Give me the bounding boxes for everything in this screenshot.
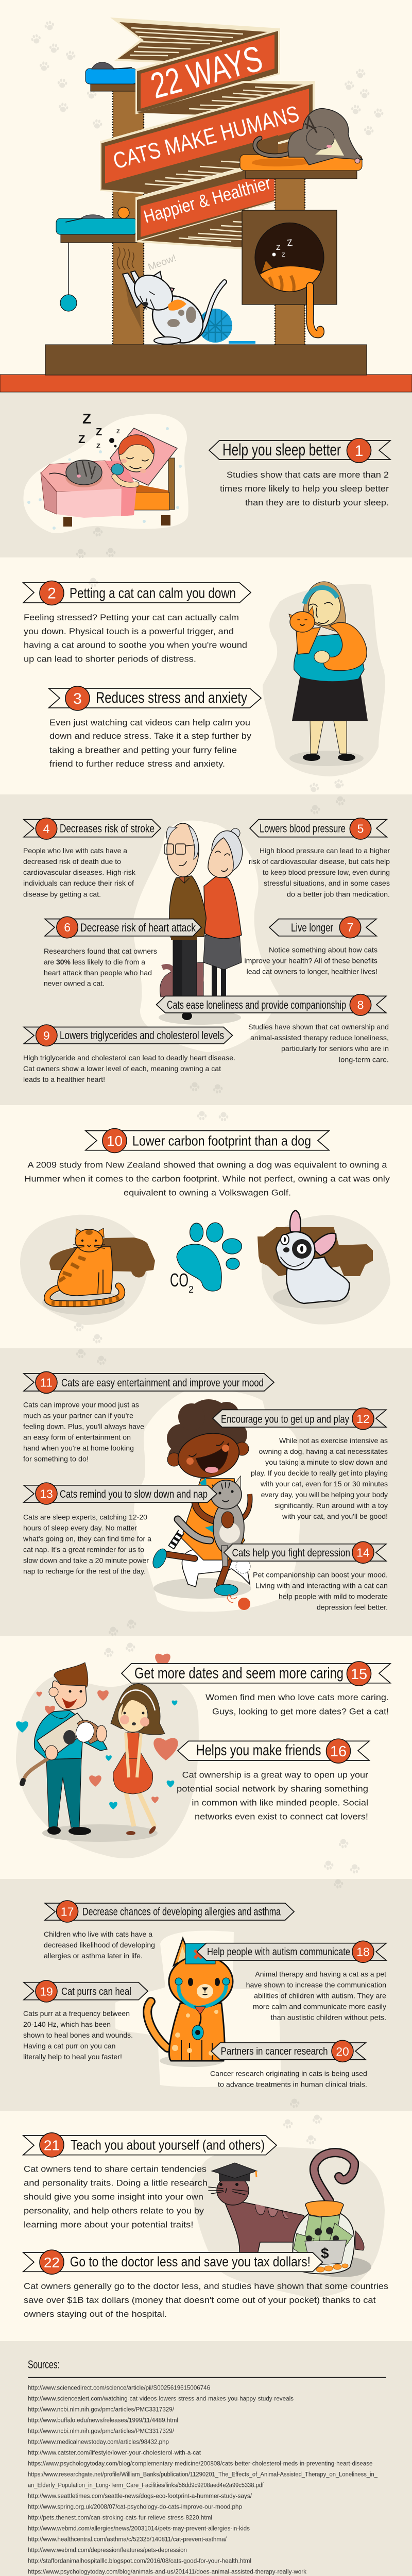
title line 2: CATS MAKE HUMANS [111,101,302,174]
background paw prints [30,20,384,2145]
banner 4: 4 [43,822,50,836]
text 18: more calm and communicate more easily [253,2003,386,2011]
banner 4: Decreases risk of stroke [60,822,154,835]
text 5: High blood pressure can lead to a higher [260,846,390,855]
section 1 illustration: boy sleeping with cat: Z [78,433,85,446]
text 10: equivalent to owning a Volkswagen Golf. [124,1188,291,1198]
text 8: animal-assisted therapy reduce loneliness, [250,1033,389,1042]
banner 14: Cats help you fight depression [232,1547,350,1559]
graduate cat and money jar illustration: $ [321,2245,329,2261]
text 20: to advance treatments in human clinical trials. [218,2080,367,2088]
text 12: play. If you decide to really get into playing [251,1469,388,1477]
sleeping orange cat in house [255,238,324,334]
sources list: http://www.webmd.com/allergies/news/20031014/pets-may-prevent-allergies-in-kids [28,2526,250,2532]
banner 14: 14 [356,1546,370,1560]
meow text: Meow! [147,252,178,273]
floor bar [0,375,412,392]
text 7 [244,945,377,975]
mouse middle [66,215,105,222]
text 4: disease by getting a cat. [23,890,101,899]
banner 16: Helps you make friends [196,1742,321,1759]
sources list: http://www.sciencealert.com/watching-cat-videos-lowers-stress-and-makes-you-happy-study-reveals [28,2396,294,2402]
sources list: http://www.seattletimes.com/seattle-news/dogs-eco-footprint-a-hummer-study-says/ [28,2494,252,2500]
text 19 [23,2009,133,2061]
title line 1: 22 WAYS [147,38,266,106]
text 15: Women find men who love cats more caring. [205,1692,389,1702]
text 9: High triglyceride and cholesterol can lead to deadly heart disease. [23,1054,235,1062]
banner 14 [224,1541,386,1563]
text 14: help people with mild to moderate [279,1592,388,1600]
text 12: with your cat, and you'll be good! [282,1512,388,1520]
text 8: particularly for seniors who are in [281,1044,389,1053]
text 21: and personality traits. Doing a little research [24,2178,208,2188]
text 7: improve your health? All of these benefits [244,956,377,964]
orange cat with car [20,1215,155,1325]
text 13: Cats are sleep experts, catching 12-20 [23,1513,147,1521]
text 10: A 2009 study from New Zealand showed that owning a dog was equivalent to owning a [28,1160,387,1170]
text 9: Cat owners show a lower level of each, meaning owning a cat [23,1064,221,1073]
text 11: Cats can improve your mood just as [23,1401,139,1409]
text 7: lead cat owners to longer, healthier lives! [247,967,377,975]
sources list: http://www.webmd.com/depression/features/pets-depression [28,2548,187,2554]
sources list: http://www.medicalnewstoday.com/articles/98432.php [28,2439,169,2446]
sources list: http://staffordanimalhospitalllc.blogspot.com/2016/08/cats-good-for-your-health.html [28,2558,251,2565]
doctor cat illustration [115,1930,281,2087]
banner 22: Go to the doctor less and save you tax dollars! [70,2254,311,2269]
text 17 [44,1930,155,1960]
text 11: feeling down. Plus, you'll always have [23,1422,144,1431]
section 1 illustration: boy sleeping with cat: Z [116,429,120,435]
mouse top [92,62,132,69]
text 2: Feeling stressed? Petting your cat can actually calm [24,613,239,622]
banner 7: Live longer [291,921,333,934]
text 6: Researchers found that cat owners [44,947,157,955]
banner 11 [24,1371,274,1393]
banner 10 [85,1128,329,1153]
text 21: Cat owners tend to share certain tendencies [24,2164,207,2174]
text 8: long-term care. [339,1055,389,1063]
sources list: http://www.ncbi.nlm.nih.gov/pmc/articles/PMC3317329/ [28,2407,175,2413]
banner 17: 17 [61,1905,74,1919]
text 19: 20-140 Hz, which has been [23,2020,111,2028]
text 8 [248,1023,389,1063]
text 22: owners staying out of the hospital. [24,2309,167,2319]
banner 11: 11 [40,1376,53,1389]
text 22: Cat owners generally go to the doctor less, and studies have shown that some countries [24,2281,388,2291]
text 19: shown to heal bones and wounds. [23,2031,133,2039]
banner 13: Cats remind you to slow down and nap [60,1488,208,1500]
text 5: stressful situations, and in some cases [264,879,390,887]
text 5: to keep blood pressure low, even during [263,868,390,876]
banner 18: Help people with autism communicate [207,1946,350,1958]
banner 1: 1 [355,443,363,460]
banner 6: Decrease risk of heart attack [80,921,196,934]
banner 10: Lower carbon footprint than a dog [132,1133,311,1148]
toy ball on string [60,295,77,311]
text 3: friend to further reduce stress and anxiety. [49,759,225,769]
text 18: have shown to increase the communication [246,1981,386,1989]
sleeping orange cat in house: Z [286,238,293,248]
sources list [28,2385,378,2576]
banner 13: 13 [40,1487,53,1500]
text 19: literally help to heal you faster! [23,2053,122,2061]
paw footprint with CO2 [170,1221,242,1295]
sources heading: Sources: [28,2358,60,2371]
text 13: what's going on, they can find time for a [23,1535,151,1543]
sources list: http://www.catster.com/lifestyle/lower-your-cholesterol-with-a-cat [28,2450,201,2456]
text 13: hours of sleep every day. No matter [23,1524,137,1532]
text 13: slow down and take a 20 minute power [23,1556,149,1565]
banner 12 [213,1408,386,1430]
sources list: http://www.spring.org.uk/2008/07/cat-psychology-do-cats-improve-our-mood.php [28,2504,242,2511]
text 14: Living with and interacting with a cat can [255,1582,388,1590]
text 11: hand when you're at home looking [23,1444,134,1452]
banner 3: Reduces stress and anxiety [96,689,247,706]
text 17: Children who live with cats have a [44,1930,152,1938]
banner 9: 9 [43,1029,50,1042]
text 10: Hummer when it comes to the carbon footprint. While not perfect, owning a cat was only [24,1174,390,1184]
banner 21: Teach you about yourself (and others) [71,2138,265,2153]
section 1 illustration: boy sleeping with cat [23,411,188,533]
text 1: Studies show that cats are more than 2 [227,470,389,480]
text 15 [205,1692,389,1716]
calico cat scratching [117,247,225,352]
banner 21: 21 [44,2137,60,2154]
text 10 [24,1160,390,1198]
sources list: https://www.psychologytoday.com/blog/animals-and-us/201411/does-animal-assisted-therapy-really-work [28,2569,306,2575]
text 9 [23,1054,235,1083]
grey cat on platform [255,109,363,165]
text 3: taking a breather and petting your furry feline [49,745,237,755]
section 1 illustration: boy sleeping with cat: Z [96,427,102,438]
text 17: allergies or asthma later in life. [44,1952,143,1960]
text 11: much as your partner can if you're [23,1412,133,1420]
text 2: you down. Physical touch is a powerful trigger, and [24,626,234,636]
text 11: an easy form of entertainment on [23,1433,131,1442]
text 21: should give you some insight into your own [24,2192,203,2202]
text 13: nap to recharge for the rest of the day. [23,1567,146,1575]
banner 5: Lowers blood pressure [260,822,346,835]
text 12: every day, you will be helping your body [261,1490,388,1499]
banner 3: 3 [73,690,82,707]
banner 9 [24,1025,233,1046]
energetic woman with cats illustration [134,1389,300,1612]
text 6: are 30% less likely to die from a [44,958,145,966]
text 3 [49,718,252,769]
text 12: While not as exercise intensive as [279,1436,388,1445]
text 15: Guys, looking to get more dates? Get a cat! [212,1706,389,1716]
text 1 [220,470,389,507]
banner 20: 20 [336,2045,349,2058]
title line 3: Happier & Healthier [142,173,273,227]
banner 4 [24,818,161,839]
banner 8: 8 [357,998,364,1011]
cat tower [45,69,367,375]
text 18: abilities of children with autism. They are [254,1992,386,2000]
banner 8 [157,994,386,1015]
text 12: owning a dog, having a cat necessitates [259,1447,388,1455]
text 6 [44,947,157,988]
text 8: Studies have shown that cat ownership and [248,1023,389,1031]
banner 15 [122,1662,390,1686]
banner 7: 7 [347,921,353,934]
text 17: decreased likelihood of developing [44,1941,155,1949]
text 5: do a better job than medication. [287,890,390,899]
banner 21 [23,2133,277,2157]
text 14 [253,1570,388,1612]
text 5 [249,846,390,899]
text 4: People who live with cats have a [23,846,127,855]
text 12 [251,1436,388,1520]
dog with jeep [258,1211,390,1325]
text 21: personality, and help others relate to you by [24,2206,204,2216]
text 6: heart attack than people who had [44,969,152,977]
banner 19 [24,1980,148,2002]
banner 2: 2 [47,585,56,602]
banner 15: 15 [351,1666,367,1683]
text 21 [24,2164,208,2230]
text 18: than austistic children without pets. [271,2013,386,2022]
text 4: cardiovascular diseases. High-risk [23,868,136,876]
text 3: down and reduce stress. Take it a step further by [49,731,252,741]
section 1 illustration: boy sleeping with cat: Z [82,411,91,427]
banner 12: Encourage you to get up and play [221,1414,349,1426]
woman hugging cat illustration [263,582,385,776]
text 18 [246,1970,386,2022]
text 1: than they are to disturb your sleep. [245,498,389,507]
graduate cat and money jar illustration [192,2147,385,2298]
text 2: having a cat around to soothe you when you're wound [24,640,247,650]
banner 19: 19 [40,1985,53,1998]
text 5: risk of cardiovascular disease, but cats help [249,857,390,866]
sources list: https://www.psychologytoday.com/blog/complementary-medicine/200808/cats-better-cholesterol-meds-in-preventing-heart-disease [28,2461,373,2467]
sources list: http://www.sciencedirect.com/science/article/pii/S0025619615006746 [28,2385,210,2392]
sources list: http://www.buffalo.edu/news/releases/1999/11/4489.html [28,2418,178,2424]
text 22 [24,2281,388,2319]
paw footprint with CO2: 2 [188,1284,194,1295]
paw footprint with CO2: CO [170,1269,188,1291]
banner 17: Decrease chances of developing allergies and asthma [82,1906,281,1918]
text 12: significantly. Run around with a toy [274,1501,388,1510]
text 16: in common with like minded people. Social [192,1798,368,1807]
text 4: decreased risk of death due to [23,857,121,866]
banner 2 [23,581,251,605]
banner 12: 12 [356,1412,370,1426]
sources list: an_Elderly_Population_in_Long-Term_Care_Facilities/links/56dd9c9208aed4e2a99c5338.pdf [28,2483,264,2489]
banner 9: Lowers triglycerides and cholesterol levels [60,1029,224,1042]
couple with cat illustration [16,1654,199,1858]
banner 2: Petting a cat can calm you down [70,585,236,601]
text 18: Animal therapy and having a cat as a pet [255,1970,386,1978]
section 1 illustration: boy sleeping with cat: Z [96,442,100,450]
text 20: Cancer research originating in cats is being used [210,2069,367,2077]
banner 18: 18 [356,1945,370,1959]
text 6: never owned a cat. [44,979,105,988]
text 21: learning more about your potential traits! [24,2220,194,2230]
banner 7 [269,917,376,938]
text 12: you taking a minute to slow down and [265,1458,388,1466]
right platform and cat house [240,155,362,304]
banner 22 [23,2250,322,2274]
banner 17 [45,1901,294,1922]
banner 3 [48,686,261,710]
banner 20: Partners in cancer research [221,2046,328,2057]
banner 18 [197,1941,386,1962]
banner 5 [250,818,387,839]
sleeping orange cat in house: Z [276,243,281,251]
orange ball [118,207,129,218]
banner 1 [209,438,390,463]
sources list: https://www.researchgate.net/profile/William_Banks/publication/11290201_The_Effects_of_Animal-Assisted_Therapy_on_Loneliness_in_ [28,2472,378,2478]
banner 5: 5 [357,822,364,836]
banner 16: 16 [330,1743,347,1760]
text 20 [210,2069,367,2088]
banner 15: Get more dates and seem more caring [134,1665,344,1682]
banner 20 [211,2040,366,2062]
text 19: Cats purr at a frequency between [23,2009,130,2018]
elderly couple illustration [133,821,279,1052]
banner 6 [45,917,201,938]
banner 8: Cats ease loneliness and provide companionship [167,998,346,1011]
banner 22: 22 [44,2255,60,2270]
text 2: up can lead to shorter periods of distress. [24,654,196,664]
text 14: depression feel better. [317,1603,388,1612]
banner 10: 10 [107,1133,123,1149]
banner 1: Help you sleep better [222,440,341,459]
text 16: potential social network by sharing something [177,1784,368,1794]
text 22: save over $1B tax dollars (money that doesn't come out of your pocket) thanks to cat [24,2295,376,2305]
sources list: http://www.healthcentral.com/asthma/c/52325/140811/cat-prevent-asthma/ [28,2537,227,2543]
banner 11: Cats are easy entertainment and improve your mood [61,1377,264,1389]
text 3: Even just watching cat videos can help calm you [49,718,250,727]
text 13: cat nap. It's a great reminder for us to [23,1546,144,1554]
title ribbon [100,18,315,249]
text 19: Having a cat purr on you can [23,2042,115,2050]
text 16 [177,1770,368,1821]
text 7: Notice something about how cats [269,945,377,954]
text 16: Cat ownership is a great way to open up your [182,1770,368,1780]
sources list: http://pets.thenest.com/can-stroking-cats-fur-relieve-stress-8220.html [28,2515,212,2521]
sleeping orange cat in house: Z [282,252,285,258]
text 9: leads to a healthier heart! [23,1075,105,1083]
text 13 [23,1513,151,1575]
text 1: times more likely to help you sleep better [220,484,389,494]
blue yarn ball [198,309,255,344]
text 14: Pet companionship can boost your mood. [253,1570,388,1579]
text 4: individuals can reduce their risk of [23,879,134,887]
banner 16 [178,1739,369,1763]
text 11 [23,1401,144,1463]
banner 6: 6 [64,921,71,934]
banner 13 [24,1483,217,1504]
text 12: with your cat, even for 15 or 30 minutes [260,1480,388,1488]
text 16: networks even exist to connect cat lovers! [195,1811,368,1821]
sources list: http://www.ncbi.nlm.nih.gov/pmc/articles/PMC3317329/ [28,2429,175,2435]
text 2 [24,613,247,664]
text 11: for something to do! [23,1455,89,1463]
banner 19: Cat purrs can heal [61,1986,131,1997]
text 4 [23,846,136,899]
